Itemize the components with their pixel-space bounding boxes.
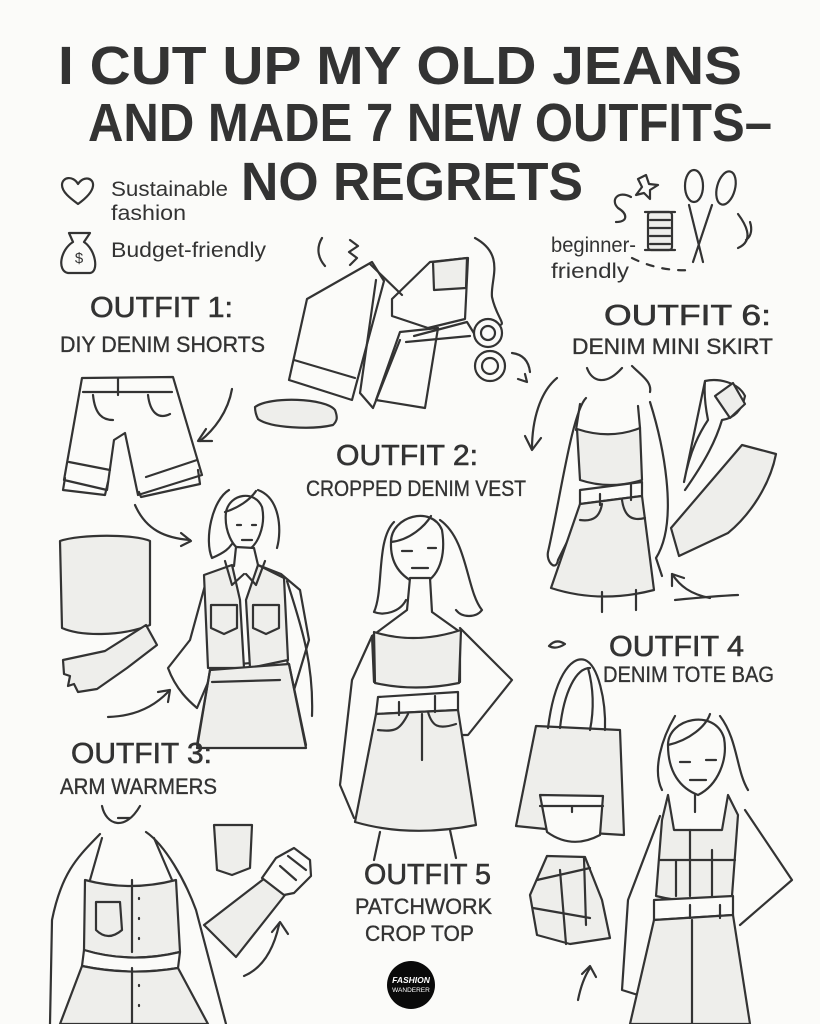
icon: hand with arm warmer [204, 848, 311, 976]
heading: outfit 2: OUTFIT 2: [336, 440, 478, 472]
logo: FASHION [392, 975, 431, 985]
heading: outfit 6: OUTFIT 6: [604, 300, 771, 332]
heading: outfit 2 [306, 440, 526, 501]
icon: denim scrap [214, 825, 252, 875]
badge: sustainable fashion [62, 178, 228, 225]
heading: outfit 3 [60, 738, 217, 799]
badge: sustainable fashion: Sustainable [111, 178, 228, 201]
title: AND MADE 7 NEW OUTFITS– [88, 93, 772, 153]
icon: patchwork pieces [530, 856, 610, 1000]
heading: outfit 3: OUTFIT 3: [71, 738, 212, 770]
illustration: jeans cut apart [255, 238, 530, 428]
illustration: denim shorts [63, 377, 232, 546]
illustration: tote bag [516, 659, 624, 842]
badge: beginner-friendly [551, 234, 692, 283]
illustration: woman in mini skirt right [525, 366, 668, 612]
badge: budget-friendly [61, 233, 267, 273]
logo [387, 961, 435, 1009]
heading: outfit 4: DENIM TOTE BAG [603, 662, 774, 687]
badge: budget-friendly: $ [75, 250, 84, 267]
heading: outfit 1 [60, 292, 265, 357]
badge: beginner-friendly: friendly [551, 260, 630, 283]
logo: WANDERER [392, 987, 430, 994]
badge: beginner-friendly: beginner- [551, 234, 636, 257]
icon: arm warmer right [671, 445, 776, 600]
heading: outfit 6 [572, 300, 773, 359]
heading: outfit 5 [355, 859, 492, 946]
icon: scissors [406, 319, 505, 381]
heading: outfit 2: CROPPED DENIM VEST [306, 476, 526, 501]
denim band [255, 400, 337, 428]
illustration: woman in patchwork top [622, 714, 792, 1024]
icon: glove piece [63, 625, 170, 717]
title [58, 36, 772, 212]
heading: outfit 5: OUTFIT 5 [364, 859, 491, 891]
title: I CUT UP MY OLD JEANS [58, 36, 742, 96]
title: NO REGRETS [241, 152, 583, 212]
illustration: woman in mini skirt centre [340, 516, 512, 860]
heading: outfit 1: OUTFIT 1: [90, 292, 233, 324]
heading: outfit 1: DIY DENIM SHORTS [60, 332, 265, 357]
illustration: woman in cropped vest [168, 490, 312, 748]
icon: denim piece [60, 536, 150, 634]
heading: outfit 6: DENIM MINI SKIRT [572, 334, 773, 359]
heading: outfit 4 [549, 631, 774, 687]
icon: sewing tools [615, 169, 751, 262]
heading: outfit 4: OUTFIT 4 [609, 631, 744, 663]
heading: outfit 5: CROP TOP [365, 921, 474, 946]
heading: outfit 5: PATCHWORK [355, 894, 492, 919]
badge: sustainable fashion: fashion [111, 202, 186, 225]
heading: outfit 3: ARM WARMERS [60, 774, 217, 799]
badge: budget-friendly: Budget-friendly [111, 239, 267, 262]
icon: hand with cuff [684, 380, 745, 490]
illustration: woman in arm warmers top [50, 806, 226, 1024]
